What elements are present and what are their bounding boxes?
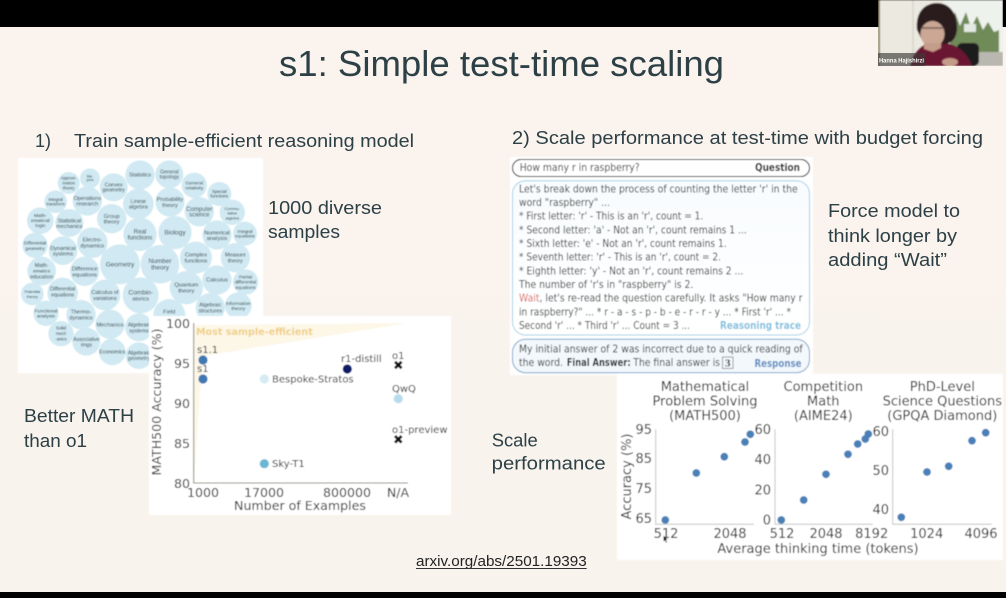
bubble: Convex geometry: geometry: [103, 188, 125, 194]
bubble: Differential geometry: [22, 233, 48, 258]
y axis tick labels: 85: [174, 436, 190, 451]
chart: AIME24: 512: [770, 527, 794, 542]
bubble: Integral equations: equations: [235, 234, 255, 239]
question pill: Question: [755, 162, 800, 174]
webcam video: speaker: [878, 0, 1003, 66]
bubble: Linear algebra: [123, 189, 154, 219]
shared x axis title: Average thinking time (tokens): [717, 542, 919, 557]
bubble: Combinatorics: atorics: [132, 296, 149, 302]
bubble: Computer science: Computer: [186, 207, 212, 213]
chart: MATH500: 85: [635, 452, 652, 467]
chart title: AIME24: Math: [807, 394, 840, 410]
chart: AIME24: 20: [754, 484, 771, 498]
bubble: Functional analysis: analysis: [37, 314, 56, 320]
reasoning trace box: Wait: [519, 293, 540, 305]
bubble: Differential equations: [47, 278, 78, 308]
point: r1-distill: r1-distill: [341, 354, 382, 365]
bubble: Mathematics education: Math-: [35, 263, 49, 269]
text: Better MATH than o1: [24, 405, 134, 451]
bubble: Statistics: [125, 160, 155, 190]
reasoning trace box: word "raspberry" ...: [519, 197, 610, 209]
text: Scale performance: performance: [492, 452, 606, 474]
bubble: Solid mechanics: -anics: [55, 336, 67, 341]
bubble: Probability theory: [155, 187, 185, 217]
reasoning trace box: Let's break down the process of counting the letter 'r' in the: [519, 184, 798, 196]
point: o1: [392, 351, 404, 368]
title: s1: Simple test-time scaling: [279, 43, 724, 84]
chart: MATH500 accuracy vs number of examples: [149, 316, 451, 515]
chart: AIME24: 40: [754, 453, 771, 468]
bubble: Potential theory: Potential: [25, 289, 40, 294]
point: o1-preview: [392, 425, 448, 443]
bubble: Associative rings: [72, 328, 100, 356]
bubble: Complex functions: [180, 242, 212, 274]
y axis tick labels: 80: [174, 476, 190, 491]
bubble: Special functions: functions: [210, 194, 229, 199]
bubble: Statistical mechanics: Statistical: [58, 218, 81, 224]
bubble: Information theory: theory: [231, 306, 246, 312]
bubble: Algebraic structures: [196, 293, 225, 322]
y axis tick labels: 90: [174, 396, 190, 411]
question pill: [512, 160, 810, 176]
bubble: Calculus: Calculus: [206, 278, 228, 284]
bubble: Mechanics: [95, 310, 125, 339]
bubble: General topology: [155, 160, 183, 188]
bubble: Differential geometry: geometry: [25, 246, 45, 251]
bubble: Commutative algebra: tative: [228, 211, 238, 216]
bubble: Solid mechanics: mech: [56, 331, 67, 336]
bubble: Baryons: Bar-: [87, 174, 93, 178]
bubble: Statistical mechanics: mechanics: [56, 224, 83, 230]
bubble: Mathematics education: ematics: [33, 269, 51, 275]
shared y axis title: Accuracy (%): [620, 434, 635, 519]
bubble: Convex geometry: [100, 173, 128, 201]
reasoning trace box: [512, 181, 810, 335]
bubble: Combinatorics: Combin-: [128, 289, 153, 296]
x axis tick labels: 1000: [187, 485, 219, 500]
response box: The final answer is: [632, 357, 720, 369]
bubble: Linear algebra: Linear: [130, 199, 146, 205]
bubble: Integral equations: [233, 222, 257, 246]
bubble: Mathematics education: education: [30, 274, 53, 280]
bubble: Approximation theory: Approxi-: [61, 176, 77, 181]
chart: GPQA Diamond: 60: [872, 425, 889, 440]
chart title: AIME24: (AIME24): [794, 409, 853, 424]
bubble: Associative rings: Associative: [73, 337, 99, 343]
bubble: Quantum theory: theory: [178, 289, 194, 295]
highlight wedge: most sample-efficient: [194, 323, 408, 482]
response box: [512, 339, 810, 373]
heading: step 2: 2) Scale performance at test-time with budget forcing: [512, 128, 983, 148]
bubble: Integral transform: [44, 190, 67, 213]
reasoning trace box: Second 'r' ... * Third 'r' ... Count = 3 ...: [519, 320, 690, 332]
chart title: GPQA Diamond: (GPQA Diamond): [887, 409, 997, 424]
text: Force model to think longer: think longer by: [828, 225, 958, 246]
bubble: Dynamical systems: [49, 236, 77, 265]
text: Scale performance: Scale: [492, 430, 538, 451]
chart: GPQA Diamond: 40: [872, 503, 889, 518]
bubble: Calculus of variations: Calculus of: [91, 290, 119, 296]
chart title: MATH500: Problem Solving: [653, 394, 757, 410]
text: Force model to think longer: [828, 200, 960, 270]
link: arXiv reference: arxiv.org/abs/2501.19393: [416, 553, 587, 570]
bubble: Number theory: Number: [148, 258, 172, 265]
bubble: Electrodynamics: [77, 227, 108, 258]
text: Better MATH than o1: Better MATH: [24, 405, 134, 426]
bubble: Difference equations: [70, 257, 99, 286]
bubble: Quantum theory: [170, 271, 203, 304]
bubble: General relativity: General: [185, 181, 203, 187]
point: r1-distill: [341, 354, 382, 374]
chart title: MATH500: (MATH500): [669, 409, 741, 424]
panel: topic bubble cloud: [18, 158, 263, 373]
bubble: Integral transform: transform: [47, 202, 65, 207]
bubble: Differential geometry: Differential: [24, 240, 46, 245]
bubble: Information theory: [225, 292, 252, 319]
bubble: Group theory: Group: [104, 214, 120, 220]
bubble: Thermodynamics: dynamics: [69, 316, 93, 322]
point: o1: o1: [392, 351, 404, 362]
bubble: General topology: topology: [160, 175, 179, 181]
bubble: Measure theory: theory: [228, 258, 243, 264]
bubble: Measure theory: [221, 243, 250, 272]
wedge label: Most sample-efficient: [196, 327, 313, 338]
chart: GPQA Diamond: 50: [872, 464, 889, 479]
bubble: Computer science: [185, 197, 214, 226]
bubble: Group theory: theory: [104, 220, 120, 226]
bubble: Probability theory: Probability: [157, 197, 183, 203]
bubble: Partial differential equations: Partial: [239, 274, 252, 279]
reasoning trace box: * Sixth letter: 'e' - Not an 'r', count remains 1.: [519, 238, 727, 250]
bubble: Combinatorics: [123, 277, 159, 313]
bubble: Baryons: yons: [86, 178, 94, 182]
bubble: Differential equations: Differential: [50, 286, 75, 292]
bubble: Real functions: [123, 218, 157, 251]
chart: AIME24: 8192: [855, 527, 888, 542]
bubble: Operations research: Operations: [73, 196, 101, 202]
reasoning trace box: Reasoning trace: [720, 320, 801, 332]
bubble: Number theory: [141, 245, 179, 284]
bubble: Numerical analysis: analysis: [207, 236, 227, 242]
chart: AIME24: 2048: [809, 527, 843, 542]
text: Force model to think longer: adding “Wait”: [828, 249, 947, 270]
bubble: General relativity: relativity: [185, 186, 204, 192]
bubble: Difference equations: equations: [72, 272, 97, 278]
bubble: Calculus of variations: variations: [93, 296, 117, 302]
bubble: Real functions: functions: [128, 234, 152, 241]
chart title: GPQA Diamond: PhD-Level: [910, 380, 975, 395]
bubble: Complex functions: Complex: [185, 253, 207, 259]
charts: accuracy vs thinking time: [617, 374, 1003, 560]
bubble: Linear algebra: algebra: [129, 204, 149, 210]
point: s1.1: s1.1: [197, 345, 218, 356]
bubble: Algebraic systems: systems: [129, 328, 149, 334]
chart title: MATH500: Mathematical: [661, 380, 749, 395]
reasoning trace box: * Seventh letter: 'r' - This is an 'r', count = 2.: [519, 252, 721, 264]
bubble: Biology: [158, 216, 192, 249]
point: QwQ: [392, 384, 416, 403]
bubble: Economics: [99, 339, 126, 365]
heading: step 1: Train sample-efficient reasoning model: [74, 131, 414, 151]
point: Sky-T1: Sky-T1: [272, 459, 305, 470]
bubble: Integral equations: Integral: [237, 229, 252, 234]
bubble: Numerical analysis: [202, 220, 232, 250]
bubble: Number theory: theory: [151, 265, 170, 272]
icon: mouse cursor: [664, 536, 667, 543]
chart title: GPQA Diamond: Science Questions: [883, 394, 1002, 410]
chart: GPQA Diamond: 4096: [964, 527, 998, 542]
bubble: Partial differential equations: differential: [235, 279, 256, 284]
bubble: Baryons: [80, 168, 100, 188]
panel: raspberry example trace: [510, 157, 813, 375]
reasoning trace box: in raspberry?" ... * r - a - s - p - b - e - r - r - y ... * First 'r' ... *: [519, 306, 791, 318]
bubble: Mechanics: Mechanics: [96, 322, 124, 328]
bubble: Dynamical systems: systems: [53, 252, 73, 258]
chart: MATH500: 65: [635, 512, 652, 527]
chart: MATH500: 95: [635, 423, 652, 438]
point: QwQ: QwQ: [392, 384, 416, 395]
bubble: Geometry: Geometry: [106, 261, 135, 268]
bubble: Functional analysis: [33, 301, 59, 326]
chart: GPQA Diamond: 1024: [910, 527, 943, 542]
y axis title: MATH500 Accuracy (%): [149, 328, 164, 476]
x axis tick labels: N/A: [387, 485, 410, 500]
bubble: Probability theory: theory: [162, 203, 178, 209]
chart: MATH500: 512: [654, 527, 678, 542]
bubble: Commutative algebra: Commu-: [225, 206, 241, 211]
text: 1000 diverse samples: 1000 diverse: [268, 197, 382, 218]
chart: AIME24: [754, 380, 888, 542]
y axis tick labels: [166, 316, 190, 491]
chart: AIME24: 60: [754, 423, 771, 438]
bubble: Calculus: [202, 265, 232, 295]
bubble: Potential theory: [21, 283, 44, 305]
bubble: Mathematical logic: logic: [35, 223, 46, 229]
bubble: Integral transform: Integral: [48, 197, 63, 202]
chart title: MATH500: [653, 380, 757, 424]
chart title: AIME24: [784, 380, 863, 424]
bubble: Algebraic geometry: geometry: [128, 356, 150, 362]
bubble: Commutative algebra: [220, 200, 245, 225]
bubble: Partial differential equations: equations: [236, 285, 256, 290]
bubble: Mathematical logic: [27, 207, 54, 234]
x axis tick labels: 800000: [323, 485, 371, 500]
bubble: Solid mechanics: [48, 321, 74, 346]
bubble: Solid mechanics: Solid: [56, 326, 66, 331]
point: s1.1: [197, 345, 218, 365]
point: o1-preview: o1-preview: [392, 425, 448, 436]
reasoning trace box: The number of 'r's in "raspberry" is 2.: [518, 279, 693, 291]
bubble: Associative rings: rings: [81, 343, 92, 349]
x axis tick labels: [187, 485, 410, 500]
bubble: Mathematical logic: Math-: [34, 213, 47, 219]
bubble: Partial differential equations: [233, 269, 258, 295]
x axis tick labels: 17000: [244, 485, 284, 500]
response box: the word.: [519, 357, 563, 369]
bubble: Group theory: [97, 204, 126, 233]
bubble: Algebraic structures: structures: [199, 308, 222, 314]
bubble: Approximation theory: mation: [62, 180, 76, 185]
axes: [194, 323, 408, 483]
bubble: Approximation theory: [58, 172, 80, 194]
response box: Response: [754, 358, 802, 370]
bubble: Algebraic systems: [125, 313, 153, 341]
reasoning trace box: * First letter: 'r' - This is an 'r', count = 1.: [519, 211, 703, 223]
text: 1000 diverse samples: [268, 197, 382, 242]
bubble: Difference equations: Difference: [72, 266, 98, 272]
bubble: Biology: Biology: [164, 229, 186, 236]
bubble: Information theory: Information: [226, 301, 251, 307]
bubble: Thermodynamics: [66, 300, 96, 329]
bubble: Economics: Economics: [99, 350, 126, 356]
bubble: Algebraic structures: Algebraic: [199, 303, 222, 309]
heading: step 1: 1): [35, 131, 51, 151]
bubble: Algebraic geometry: [126, 342, 152, 369]
bubble: Field: [153, 299, 185, 331]
bubble: Operations research: [73, 186, 102, 216]
bubble: General relativity: [182, 173, 207, 198]
bubble: Real functions: Real: [134, 228, 146, 235]
point: Bespoke-Stratos: Bespoke-Stratos: [272, 374, 354, 386]
chart: MATH500: 2048: [713, 527, 747, 542]
bubble: Calculus of variations: [90, 280, 120, 310]
bubble: Numerical analysis: Numerical: [204, 230, 230, 236]
bubble: Measure theory: Measure: [225, 253, 246, 259]
text: Force model to think longer: Force model to: [828, 200, 960, 221]
reasoning trace box: * Eighth letter: 'y' - Not an 'r', count remains 2 ...: [519, 265, 743, 277]
chart: MATH500: [635, 380, 757, 542]
response box: 3: [725, 358, 731, 370]
bubble: General topology: General: [160, 169, 178, 175]
response box: Final Answer:: [567, 357, 631, 369]
bubble: Special functions: Special: [212, 189, 227, 194]
bubble: Geometry: [100, 244, 140, 284]
question pill: How many r in raspberry?: [520, 162, 640, 174]
y axis tick labels: 100: [166, 316, 190, 331]
bubble: Special functions: [207, 182, 231, 206]
point: s1: s1: [197, 364, 209, 375]
bubble: Dynamical systems: Dynamical: [50, 246, 76, 252]
y axis tick labels: 95: [174, 356, 190, 371]
bubble: Potential theory: theory: [27, 294, 38, 299]
response box: My initial answer of 2 was incorrect due to a quick reading of: [519, 344, 803, 356]
chart: GPQA Diamond: [872, 380, 1002, 542]
bubble: Operations research: research: [76, 202, 98, 208]
chart title: GPQA Diamond: [883, 380, 1002, 424]
chart: MATH500: 75: [635, 482, 652, 497]
bubble: Approximation theory: theory: [63, 185, 75, 190]
bubble: Field: Field: [163, 309, 175, 315]
bubble: Quantum theory: Quantum: [174, 283, 198, 289]
webcam video: speaker: Hanna Hajishirzi: [879, 58, 924, 64]
bubble: Statistical mechanics: [55, 209, 83, 237]
bubble: Statistics: Statistics: [129, 173, 151, 179]
reasoning trace box: , let's re-read the question carefully. It asks "How many r: [540, 293, 803, 305]
bubble: Commutative algebra: algebra: [226, 215, 240, 220]
point: s1: [197, 364, 209, 384]
bubble: Complex functions: functions: [185, 259, 207, 265]
text: Better MATH than o1: than o1: [24, 430, 87, 451]
bubble: Computer science: science: [189, 213, 210, 219]
bubble: Thermodynamics: Thermo-: [71, 310, 92, 316]
reasoning trace box: * Second letter: 'a' - Not an 'r', count remains 1 ...: [519, 224, 747, 236]
bubble: Mathematical logic: ematical: [31, 218, 50, 224]
bubble: Differential equations: equations: [51, 293, 75, 299]
bubble: Mathematics education: [27, 257, 56, 285]
bubble: Convex geometry: Convex: [105, 182, 123, 188]
chart title: AIME24: Competition: [784, 380, 863, 395]
x axis title: Number of Examples: [234, 498, 366, 513]
chart: AIME24: 0: [763, 514, 771, 528]
text: 1000 diverse samples: samples: [268, 221, 340, 242]
text: Scale performance: [492, 430, 606, 474]
bubble: Electrodynamics: Electro-: [83, 237, 102, 243]
bubble: Algebraic geometry: Algebraic: [128, 350, 150, 356]
bubble: Functional analysis: Functional: [34, 308, 57, 314]
bubble: Electrodynamics: dynamics: [80, 243, 104, 249]
bubble: Algebraic systems: Algebraic: [128, 323, 150, 329]
